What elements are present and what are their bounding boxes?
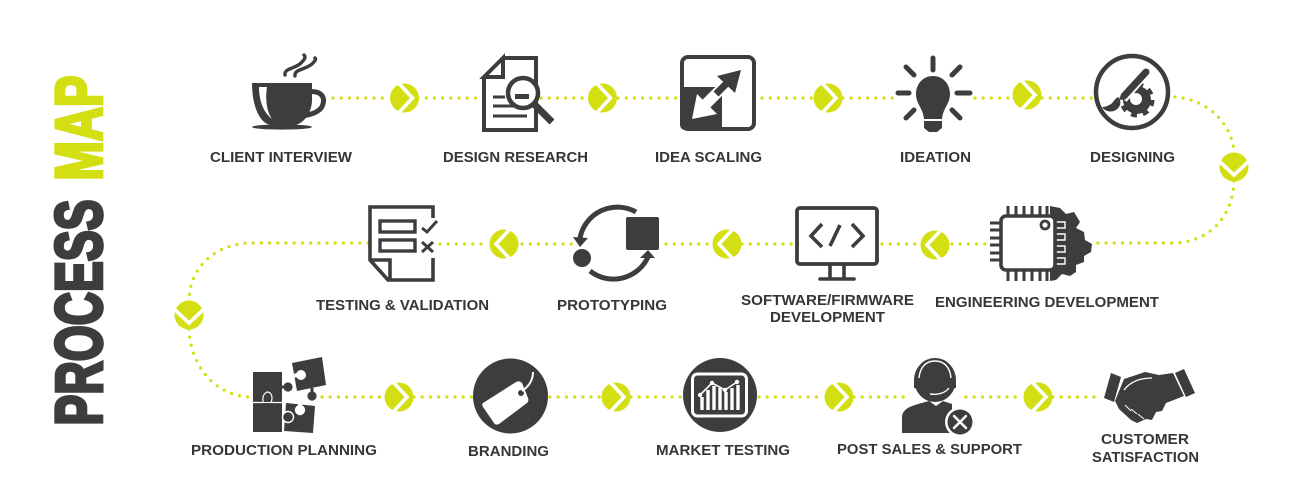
icon: monitor with code (797, 208, 877, 279)
icon: brush and gear (1096, 56, 1168, 128)
icon: market chart (683, 358, 757, 432)
dotted connector path (189, 97, 1234, 397)
icon: support agent (902, 358, 975, 437)
icon: price tag (473, 358, 548, 434)
label: customer satisfaction (1092, 432, 1199, 466)
label: prototyping: PROTOTYPING (557, 298, 667, 314)
label: post sales and support: POST SALES & SUPPORT (837, 442, 1022, 458)
icon: lightbulb (898, 58, 970, 132)
label: software and firmware development: DEVELOPMENT (770, 310, 885, 326)
icon: checklist document (370, 207, 437, 280)
arrow node 7 (left) (712, 229, 742, 259)
label: market testing: MARKET TESTING (656, 443, 790, 459)
label: engineering development: ENGINEERING DEVELOPMENT (935, 295, 1159, 311)
arrow node 11 (602, 382, 630, 412)
icon: handshake (1104, 369, 1195, 423)
arrow node 13 (1024, 382, 1052, 412)
label: idea scaling: IDEA SCALING (655, 150, 762, 166)
icon: coffee cup (252, 55, 323, 130)
arrow node 9 (down) (174, 300, 204, 330)
label: customer satisfaction: SATISFACTION (1092, 450, 1199, 466)
icon: document with magnifier (484, 58, 552, 130)
label: customer satisfaction: CUSTOMER (1101, 432, 1190, 448)
arrow node 4 (1012, 80, 1042, 110)
arrow node 5 (down) (1219, 152, 1249, 182)
arrow node 3 (814, 83, 842, 113)
arrow node 1 (390, 83, 419, 113)
label: design research: DESIGN RESEARCH (443, 150, 588, 166)
label: branding: BRANDING (468, 444, 549, 460)
label: designing: DESIGNING (1090, 150, 1175, 166)
icon: microchip with gear (990, 206, 1092, 281)
label: production planning: PRODUCTION PLANNING (191, 443, 377, 459)
icon: prototyping cycle (573, 207, 659, 279)
arrow node 8 (left) (490, 229, 518, 259)
arrow node 6 (left) (920, 230, 950, 260)
arrow node 10 (384, 382, 414, 412)
label: software and firmware development (741, 293, 914, 326)
icon: puzzle pieces (253, 357, 326, 433)
arrow node 12 (824, 382, 854, 412)
arrow node 2 (588, 83, 617, 113)
title: process map: MAP (42, 76, 116, 180)
icon: idea scaling (680, 57, 754, 130)
label: testing and validation: TESTING & VALIDATION (316, 298, 489, 314)
label: software and firmware development: SOFTWARE/FIRMWARE (741, 293, 914, 309)
title: process map: PROCESS (42, 200, 116, 426)
label: client interview: CLIENT INTERVIEW (210, 150, 352, 166)
label: ideation: IDEATION (900, 150, 971, 166)
